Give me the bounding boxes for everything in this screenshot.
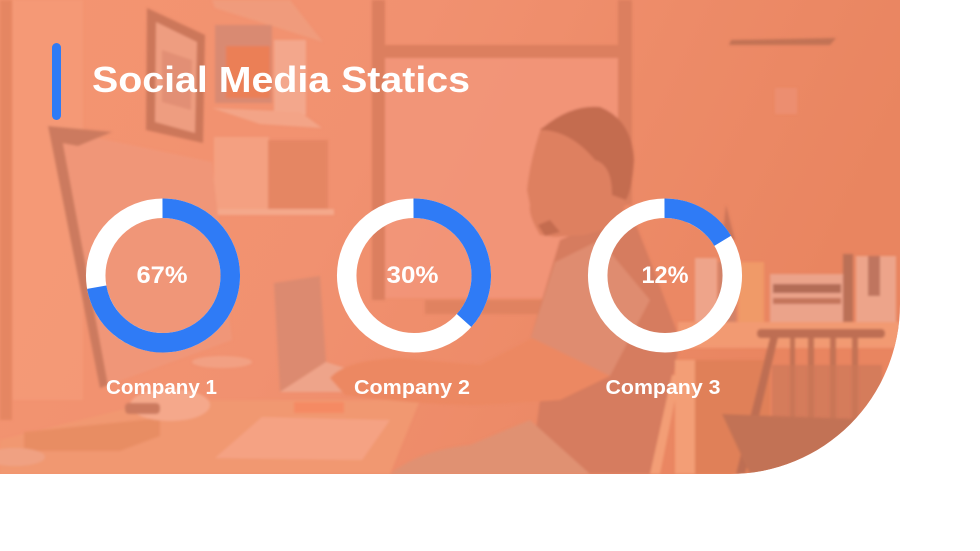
label: company 2: Company 2 xyxy=(354,377,470,399)
photo: desk items xyxy=(0,389,420,474)
photo: window frame xyxy=(372,0,632,314)
sleeve xyxy=(530,240,650,376)
infographic slide xyxy=(0,0,900,474)
donut chart: company 3 xyxy=(598,208,732,343)
legs xyxy=(390,420,590,474)
value: 30%: 30% xyxy=(386,262,438,289)
photo: wall and window strip xyxy=(0,0,618,420)
hair xyxy=(540,107,634,200)
title: Social Media Statics xyxy=(92,59,470,100)
beard xyxy=(538,220,560,236)
torso xyxy=(536,226,678,474)
photo: wall vent and outlet xyxy=(729,38,836,114)
photo: person at desk xyxy=(330,107,680,474)
label: company 1: Company 1 xyxy=(106,377,217,399)
value: 67%: 67% xyxy=(136,262,188,289)
panel: tinted photo background xyxy=(0,0,900,474)
photo: laptop xyxy=(274,276,345,392)
photo: bookshelf on right table xyxy=(695,205,896,322)
photo: wall shelves and books xyxy=(212,0,334,215)
arm xyxy=(330,338,610,405)
photo: computer monitor xyxy=(48,126,252,388)
photo: table and chair xyxy=(650,322,900,474)
photo: picture frame xyxy=(146,8,205,143)
label: company 3: Company 3 xyxy=(606,377,720,399)
donut chart: company 1 xyxy=(96,208,230,343)
title accent bar xyxy=(52,43,61,120)
value: 12%: 12% xyxy=(642,262,688,289)
donut chart: company 2 xyxy=(347,208,481,343)
face xyxy=(527,128,625,237)
